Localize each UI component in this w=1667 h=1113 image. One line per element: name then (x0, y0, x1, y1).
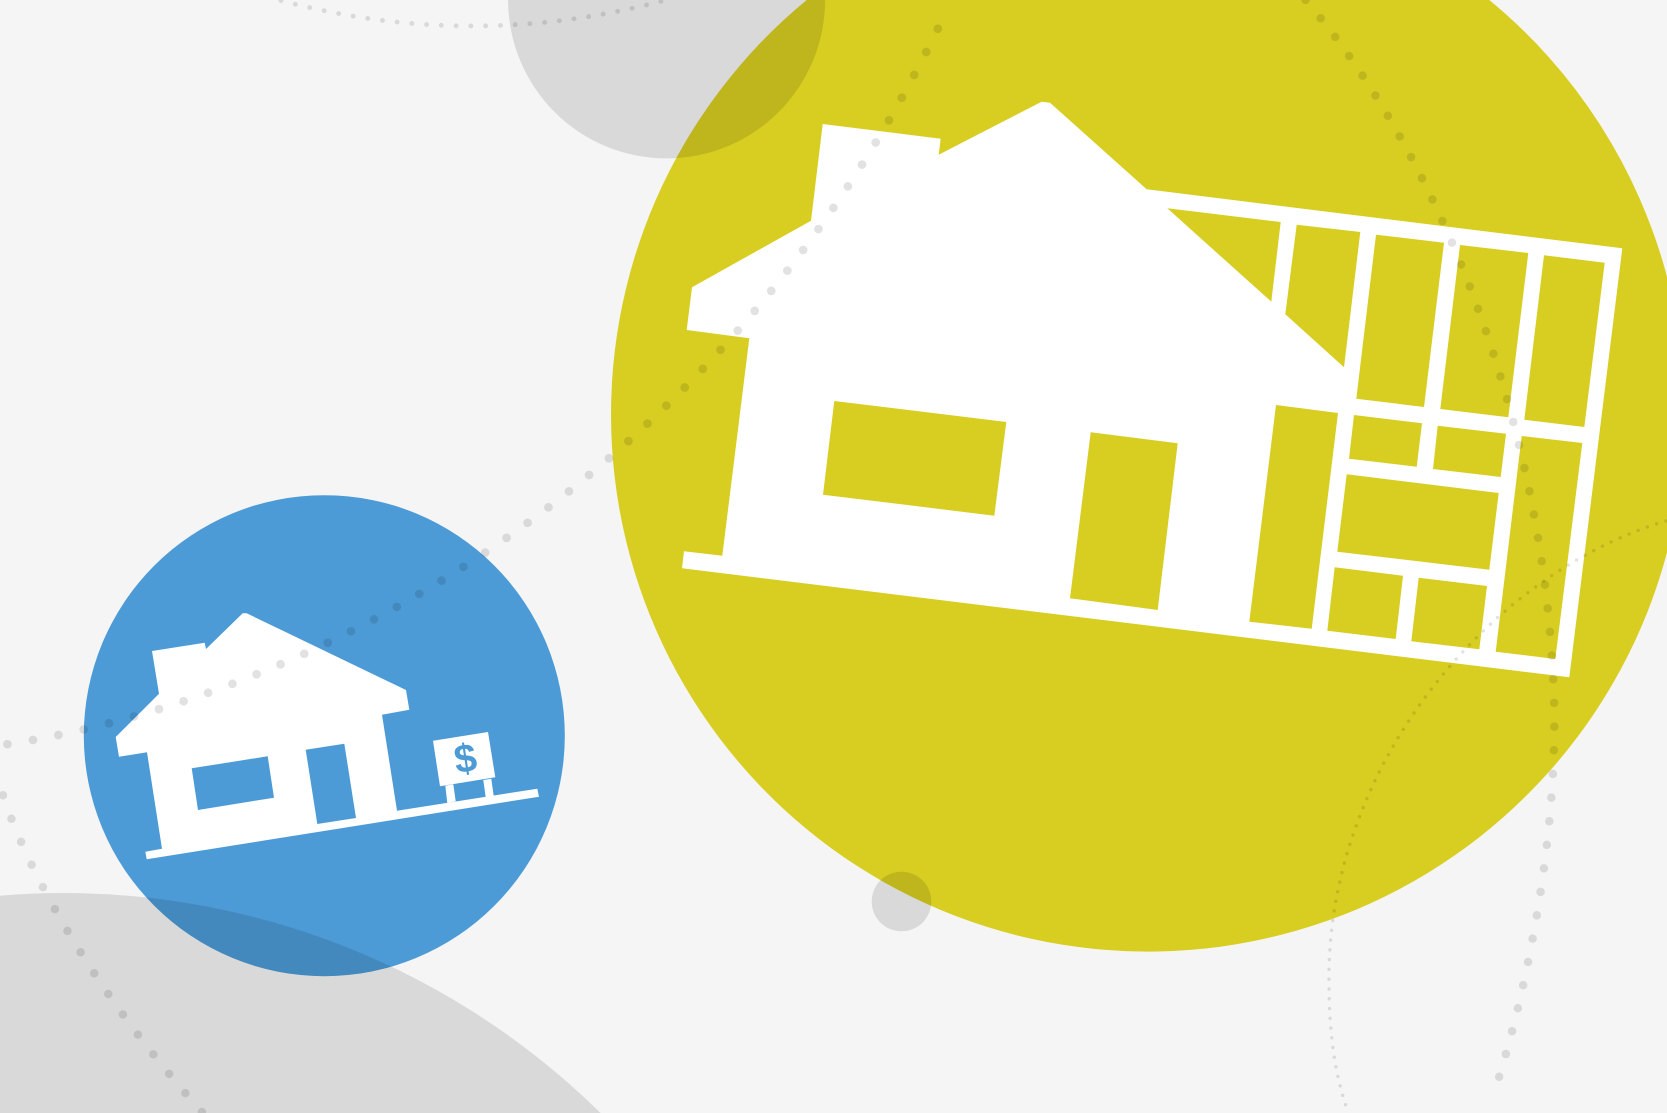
yellow circle (611, 0, 1667, 952)
dollar symbol: $ (451, 736, 480, 782)
dotted path: right arc (1306, 0, 1554, 1097)
grey circle: top (508, 0, 825, 158)
blue circle (84, 495, 565, 976)
sign post right (483, 779, 494, 797)
dotted path: lower left (3, 795, 202, 1112)
sign post left (445, 784, 456, 803)
grey circle: small centre (872, 872, 931, 931)
dotted path: top (281, 1, 664, 26)
dotted path: thin right curve (1329, 521, 1666, 1112)
icon: small house with for-sale sign (116, 613, 539, 859)
small house body (116, 613, 539, 859)
icon: large house with floor plan (682, 102, 1622, 677)
dotted path: rising from small house to large house (7, 18, 943, 744)
grey circle: bottom left (0, 893, 601, 1113)
sign board (433, 732, 495, 786)
